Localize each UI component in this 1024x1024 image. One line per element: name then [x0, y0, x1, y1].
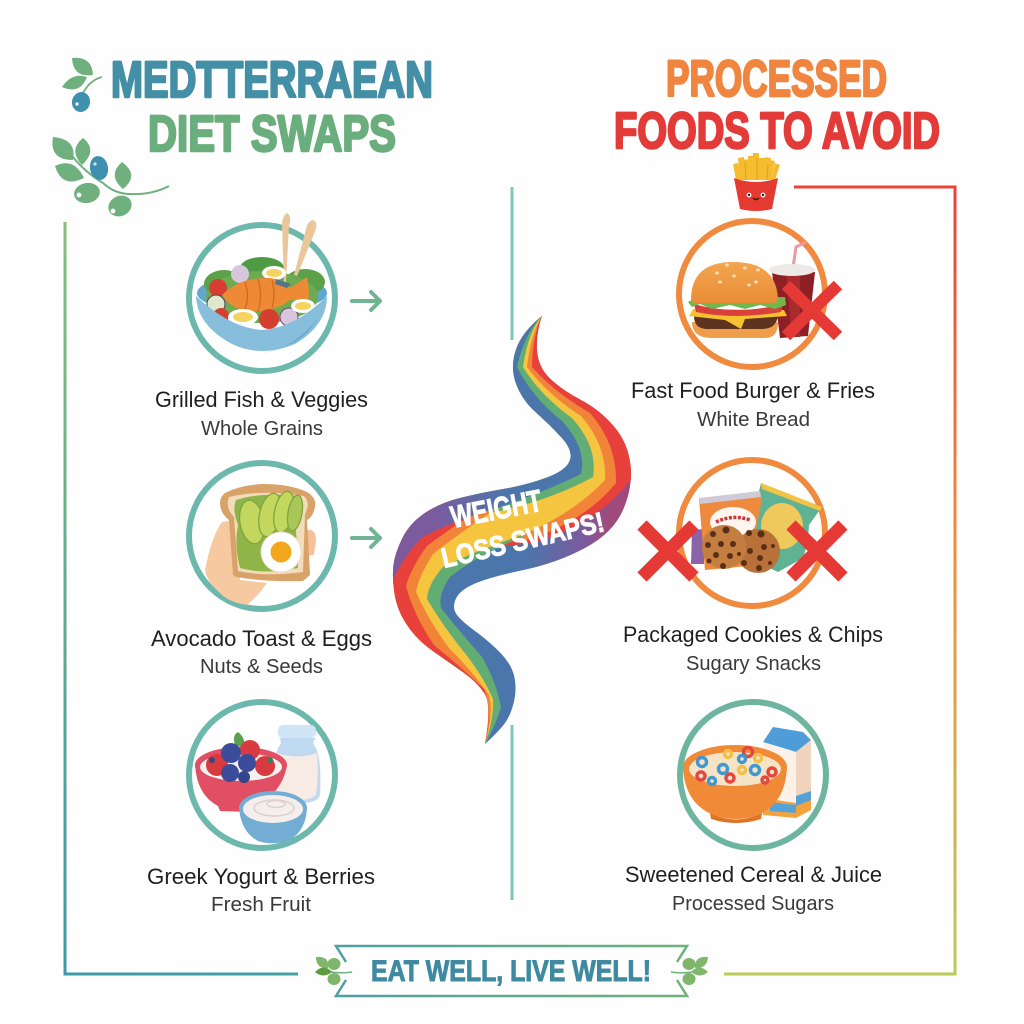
label: packaged cookies: Sugary Snacks [686, 653, 821, 675]
banner: eat well, live well: EAT WELL, LIVE WELL! [371, 955, 651, 988]
center divider line [510, 187, 514, 900]
icon: cookies and chip bags in orange ring with crosses [642, 460, 843, 606]
frame line: left green-to-teal [64, 222, 298, 974]
rainbow ribbon [392, 316, 631, 744]
label: fast food: Fast Food Burger & Fries [631, 378, 875, 403]
label: sweetened cereal: Sweetened Cereal & Juice [625, 862, 882, 887]
label: grilled fish [155, 387, 368, 440]
icon: yogurt bowls in teal ring [189, 702, 335, 848]
item: packaged cookies and chips [623, 460, 883, 675]
label: grilled fish: Grilled Fish & Veggies [155, 387, 368, 412]
label: avocado toast [151, 626, 372, 678]
title: Processed Foods to Avoid [614, 50, 940, 159]
arrow [352, 292, 380, 310]
label: packaged cookies: Packaged Cookies & Chips [623, 622, 883, 647]
icon: olive branch large [52, 137, 169, 220]
label: avocado toast: Avocado Toast & Eggs [151, 626, 372, 651]
label: greek yogurt: Fresh Fruit [211, 894, 311, 916]
title: Mediterranean Diet Swaps: MEDTTERRAEAN [111, 51, 433, 108]
label: greek yogurt: Greek Yogurt & Berries [147, 864, 375, 889]
item: sweetened cereal and juice [625, 702, 882, 915]
icon: salad bowl with fish in teal ring [189, 213, 335, 371]
icon: smiling fries box [733, 153, 780, 211]
title: Processed Foods to Avoid: PROCESSED [666, 50, 887, 107]
ribbon text: weight loss swaps: LOSS SWAPS! [438, 506, 607, 574]
label: avocado toast: Nuts & Seeds [200, 656, 323, 678]
ribbon text: weight loss swaps: WEIGHT [448, 483, 545, 535]
frame line: right red-to-lime [724, 187, 955, 974]
item: fast food burger [631, 221, 875, 431]
icon: olive sprig left [315, 957, 352, 985]
icon: burger and soda in orange ring with cross [679, 221, 838, 367]
title: Mediterranean Diet Swaps [111, 51, 433, 162]
arrow [352, 529, 380, 547]
title: Mediterranean Diet Swaps: DIET SWAPS [148, 105, 396, 162]
label: fast food [631, 378, 875, 431]
label: grilled fish: Whole Grains [201, 418, 323, 440]
label: packaged cookies [623, 622, 883, 675]
label: sweetened cereal: Processed Sugars [672, 893, 834, 915]
icon: cereal bowl and carton in green ring [680, 702, 826, 848]
icon: olive sprig right [671, 957, 708, 985]
icon: olive sprig small [62, 58, 102, 114]
label: greek yogurt [147, 864, 375, 916]
icon: avocado toast in teal ring [189, 463, 335, 609]
item: avocado toast and eggs [151, 463, 380, 678]
item: grilled fish and veggies [155, 213, 380, 440]
item: greek yogurt and berries [147, 702, 375, 916]
label: sweetened cereal [625, 862, 882, 915]
label: fast food: White Bread [697, 409, 810, 431]
banner: eat well, live well [315, 946, 708, 996]
